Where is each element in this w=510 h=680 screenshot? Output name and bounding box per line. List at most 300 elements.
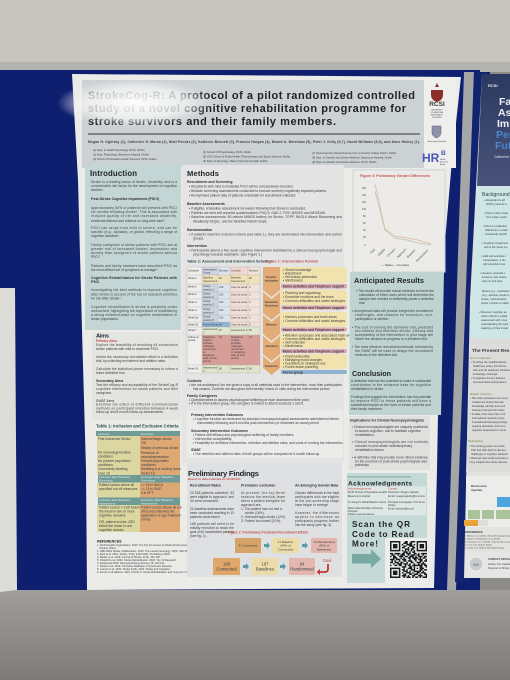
neighbour panel: the present research: • To bridge the multidisciplinary — [471, 360, 507, 364]
table 1: inclusion and exclusion criteria: Exclusion — [141, 432, 154, 436]
module 1 box: Home activities and Telephone support — [283, 284, 345, 288]
controls: has ceased. Controls are also given brief weekly 'check-in' calls during the intervention period. — [193, 387, 330, 391]
panel: introduction: specific (e.g., aphasia), or global, effecting a range of — [91, 230, 177, 234]
table 2: assessment and intervention schedule: 60 — [249, 328, 252, 332]
neighbour panel: background: with potential cross — [483, 262, 506, 266]
table 2: assessment and intervention schedule: or — [203, 350, 205, 354]
panel: implications for clinical neuropsychologists: rehabilitation. — [355, 433, 375, 437]
table 1: inclusion and exclusion criteria: Residing in a nursing home — [141, 467, 181, 471]
column: an emerging gender bias: Gender differences in the total — [295, 491, 339, 495]
y axis labels — [362, 187, 367, 247]
module 1 box — [280, 267, 347, 288]
table 2: assessment and intervention schedule: Care as usual — [231, 316, 247, 320]
table 2: assessment and intervention schedule: or telephone — [231, 350, 246, 354]
neighbour panel: the present research: between Irish and UK institu — [472, 408, 505, 412]
column: premature exclusion: 1. The patient has not had a — [241, 507, 282, 511]
baseline assessments: Baseline Assessments — [187, 202, 225, 206]
table 2: assessment and intervention schedule: support — [203, 338, 212, 342]
table 2: assessment and intervention schedule: Assessment — [203, 366, 217, 370]
panel: implications for clinical neuropsychologists: • Clinical neuropsychologists are not routinely — [352, 440, 428, 444]
table 2: assessment and intervention schedule: calls (3 time — [231, 353, 245, 357]
table 2: assessment and intervention schedule: 0 — [249, 300, 251, 304]
panel: implications for clinical neuropsychologists: • Clinical neuropsychologists are uniquely positioned — [352, 425, 428, 429]
neighbour panel: discussion agenda: Discussion — [471, 484, 487, 488]
table 2: assessment and intervention schedule: 60 — [219, 276, 222, 280]
table 1: inclusion and exclusion criteria: Screening — [141, 478, 155, 482]
display board frame — [0, 62, 510, 590]
column: recruitment rates: Recruitment Rates — [190, 484, 221, 488]
neighbour panel: the present research: Aims & Objectives: — [470, 356, 492, 360]
title: StrokeCog-R: A protocol of a pilot randomized controlled — [88, 90, 415, 102]
panel: aims: Secondary Aims — [96, 379, 123, 383]
neighbour panel: the present research: • To date, there have been mul — [470, 412, 506, 416]
HRB logo: Research — [440, 160, 448, 164]
column: an emerging gender bias: have begun to emerge. — [295, 503, 329, 507]
table 2: assessment and intervention schedule: Focus Group — [203, 322, 219, 326]
contact details: Presenter: Megan Oglesby — [388, 490, 420, 494]
panel: introduction: cognitive domains⁶. — [91, 234, 120, 238]
table 1: inclusion and exclusion criteria: Exclusion after Baseline — [141, 475, 173, 479]
column: premature exclusion: 3. Patient too unwell (10%). — [241, 519, 281, 523]
module 4 box: • Attention processes and associated brain areas — [283, 334, 355, 338]
table 1: inclusion and exclusion criteria: Inclusion after Baseline — [99, 475, 130, 479]
column: recruitment rates: 168 patients will need to be — [190, 522, 234, 526]
y axis labels: 140 — [362, 194, 367, 197]
panel: aims: Test the efficacy and acceptability of the StrokeCog-R — [96, 383, 179, 387]
table 2: assessment and intervention schedule: Week 5b — [188, 322, 199, 326]
neighbour panel: background: differences in under — [485, 228, 508, 232]
table 1: inclusion and exclusion criteria: History of previous stroke — [141, 446, 178, 450]
table 2: assessment and intervention schedule: 3 — [203, 369, 205, 373]
family caregivers: • If in the intervention group, the caregiver is invited to attend sessions 1 and 5. — [189, 402, 304, 406]
panel: implications for clinical neuropsychologists: rehabilitation teams. — [355, 448, 385, 452]
panel: anticipated results and conclusion — [349, 272, 444, 415]
neighbour panel: background: (PSCI) presents a — [486, 202, 507, 206]
table 2: assessment and intervention schedule: Group — [203, 299, 211, 303]
module 2 box: • Planning and organising — [283, 291, 321, 295]
title — [88, 90, 415, 128]
table 2: assessment and intervention schedule: session 4 — [203, 310, 215, 314]
panel: implications for clinical neuropsychologists: pathways. — [355, 463, 370, 467]
QR call to action: More! — [352, 540, 378, 548]
title: study of a novel cognitive rehabilitation programme for — [88, 103, 407, 115]
neighbour poster header — [477, 74, 510, 186]
panel: anticipated results and conclusion: • The most effective recruitment methods, informed by — [352, 345, 433, 349]
panel: anticipated results and conclusion: the SWAT will be used to design the recruitment — [355, 349, 433, 353]
panel: introduction: Cognitive Rehabilitation for Stroke Patients with — [91, 276, 177, 280]
RCSI subtitle: AND HEALTH — [431, 114, 444, 116]
module 5 box: • Psychoeducation — [283, 354, 310, 358]
panel: introduction: emotional distress and reliance on long-term care⁵. — [91, 219, 166, 223]
panel: anticipated results and conclusion: • The cost of running the definitive trial, predicted — [352, 326, 433, 330]
table 1: inclusion and exclusion criteria: conditions — [98, 463, 113, 467]
figure 2: recruitment flow — [213, 530, 337, 575]
table 2: assessment and intervention schedule: Care as usual — [231, 292, 247, 296]
neighbour panel: the present research: • This work represents one comp — [470, 396, 508, 400]
y axis labels: 20 — [363, 236, 366, 239]
table 1: inclusion and exclusion criteria: Over 18 — [98, 471, 110, 475]
module 3 box: • Memory processes and brain areas — [283, 315, 337, 319]
table 2: assessment and intervention schedule: telephone — [203, 353, 215, 357]
panel: anticipated results and conclusion: calculation of effect sizes which will determine the — [359, 293, 434, 297]
column: an emerging gender bias: participants progress further — [295, 519, 340, 523]
panel: introduction: Patients and family members have described PSCI as — [91, 264, 177, 268]
references: 7. Rohde et al. 2019. Cochrane Database of Systematic Reviews. — [97, 564, 173, 568]
table 2: assessment and intervention schedule: Minutes — [249, 268, 259, 272]
table 1: inclusion and exclusion criteria: conditions — [98, 454, 113, 458]
module 3 box — [280, 312, 347, 332]
QR code — [385, 538, 428, 583]
chevron: executive functions: Functions — [265, 304, 279, 308]
acknowledgment list: Mater Misericordiae University — [348, 506, 384, 510]
panel: aims: Examine the effect of different communication — [96, 402, 178, 406]
outcomes box: • Feasibility for definitive intervention, retention and attrition rates, and costs of running the intervention. — [193, 441, 343, 445]
table 2: assessment and intervention schedule: Week 2 — [188, 284, 197, 288]
QR call to action — [352, 520, 414, 548]
heading: preliminary findings: Preliminary Findings — [188, 469, 259, 478]
affiliations: (4) School of Physiotherapy, RCSI, Dublin. — [203, 150, 252, 154]
column: recruitment rates: been conducted resulting in 13 — [190, 511, 234, 515]
neighbour panel: the present research: ongoing discussion forums to — [472, 424, 506, 428]
randomisation: • If patients meet the inclusion criteria (see table 1), they are randomised into intervention and control — [189, 232, 342, 236]
neighbour panel: background: • Moreover, cognitive as — [479, 310, 507, 314]
panel: introduction: Family caregivers of stroke patients with PSCI are at — [91, 243, 177, 247]
table 1: inclusion and exclusion criteria: Community dwelling — [98, 467, 128, 471]
panel: introduction — [85, 165, 181, 330]
neighbour footer with badge: ISA — [473, 562, 480, 567]
HRB logo — [422, 150, 448, 166]
contact details: Email: meganoglesby@rcsi.com — [388, 494, 425, 498]
table 2: assessment and intervention schedule: Care as usual — [231, 308, 247, 312]
QR call to action: Scan the QR — [352, 520, 410, 529]
column: an emerging gender bias: at the pre-screening stage — [295, 499, 339, 503]
table 1: inclusion and exclusion criteria: Inclusion — [98, 432, 110, 436]
chevron: attention: Attention — [265, 344, 278, 348]
recruitment and screening — [187, 180, 327, 198]
table 2: assessment and intervention schedule: 0 — [249, 285, 251, 289]
panel: introduction: researched, highlighting the importance of establishing — [91, 309, 177, 313]
references — [97, 540, 193, 574]
table 2: assessment and intervention schedule: Group — [203, 307, 211, 311]
table 2: assessment and intervention schedule: 100 — [219, 316, 224, 320]
panel: anticipated results and conclusion: methods of the definitive trial. — [355, 353, 398, 357]
authors: Megan H. Oglesby (1), Catherine N. Moran (2), Niall Pender (2), Kathleen Bennett (3), Frances Horgan (4), Niamh A. Merriman (5), Peter J. Kelly (6,7), David Williams (8,9), and Anne Hickey (1). — [88, 140, 420, 144]
recruitment and screening: Recruitment and Screening — [187, 180, 233, 184]
acknowledgment list: Patient representatives — [348, 512, 375, 516]
neighbouring poster edge on the left — [0, 288, 17, 592]
panel: introduction: greater risk of increased burden, depression and — [91, 247, 177, 251]
table 2: assessment and intervention schedule: Intervention — [203, 268, 217, 272]
panel: aims: Explore the feasibility of recruiting 64 consecutive — [96, 343, 178, 347]
table 2: assessment and intervention schedule: Assessment 2 — [231, 328, 248, 332]
neighbour panel: background: and to the mood, em — [484, 245, 508, 249]
neighbour panel: the present research: • Key insights from these discuss — [469, 460, 508, 464]
neighbour panel: the present research: international research group — [472, 416, 505, 420]
neighbour panel: discussion agenda: Agenda — [471, 488, 482, 492]
column: recruitment rates — [190, 484, 234, 538]
table 2: assessment and intervention schedule: Week 4 — [188, 308, 197, 312]
chevron: psycho-education: education — [265, 278, 278, 282]
neighbour panel: the present research: Translational Neuropsychology — [472, 420, 508, 424]
outcomes box: • Cognitive function as measured by standard neuropsychological assessments administered before — [193, 417, 339, 421]
panel: anticipated results and conclusion: sample size needed to sufficiently power a definitive — [359, 297, 434, 301]
table 2: assessment and intervention schedule: Week 1 — [188, 276, 197, 280]
table 2: assessment and intervention schedule: 60 — [219, 366, 222, 370]
y axis labels: 80 — [363, 215, 366, 218]
panel: introduction: anxiety than caregivers of stroke patients without — [91, 251, 177, 255]
references: 9. James Lind Alliance. 2021. Priority 5: Stroke Rehabilitation and Long-term Care. — [97, 570, 192, 574]
table 1: inclusion and exclusion criteria: Haemorrhagic stroke — [141, 437, 172, 441]
x axis labels: Eligible — [377, 247, 386, 257]
panel: anticipated results and conclusion: rehabilitation in stroke. — [351, 387, 384, 391]
panel: aims: SWAT Aims — [96, 399, 114, 403]
box: 168 consented — [213, 558, 240, 575]
table 1: inclusion and exclusion criteria: application of age-matched — [141, 514, 181, 518]
baseline assessments — [187, 202, 342, 224]
table 2: assessment and intervention schedule: Assessment 3 — [231, 366, 248, 370]
table 2: assessment and intervention schedule: Schedule — [188, 268, 199, 272]
table 1: inclusion and exclusion criteria: <= 18 in MoCA — [141, 483, 164, 487]
baseline assessments: Weakbody SEQoL, and the Modified Rankin Scale. — [193, 220, 268, 224]
module 2 box: Home activities and Telephone support — [283, 306, 345, 310]
column: premature exclusion: Premature exclusion — [241, 484, 275, 488]
table 1: inclusion and exclusion criteria: specified cut-off measures — [99, 487, 138, 491]
panel: anticipated results and conclusion: participation or attrition. — [355, 317, 389, 321]
x axis labels: Consent — [386, 247, 396, 258]
module 3 box: • Common difficulties and useful strategies — [283, 319, 345, 323]
neighbour panel: the present research: • Meetings were audio-recorded a — [469, 456, 508, 460]
RCSI subtitle: SCIENCES — [432, 117, 443, 119]
outcomes box: Primary Intervention Outcomes — [191, 413, 243, 417]
table 2: assessment and intervention schedule: Assessment — [231, 279, 245, 283]
HRB logo: B — [441, 150, 446, 157]
arrow — [302, 542, 308, 549]
table 1: inclusion and exclusion criteria — [96, 424, 182, 532]
neighbour references: 4. Lees et al. (2014). Stroke — [465, 544, 493, 546]
module 1 box: • Mindfulness — [283, 278, 303, 282]
panel: anticipated results and conclusion: A definitive trial has the potential to make a substantial — [351, 379, 431, 383]
table 2: assessment and intervention schedule: 60 — [249, 366, 252, 370]
column: recruitment rates: patients randomised. — [190, 515, 221, 519]
table 1: inclusion and exclusion criteria: Presence of — [141, 451, 159, 455]
table 1: inclusion and exclusion criteria: No neurodegenerative — [98, 450, 131, 454]
table 1: inclusion and exclusion criteria: the mean in two or more — [99, 510, 135, 514]
neighbour panel: background: • PSCI is a collection — [483, 224, 508, 228]
glare over title — [57, 79, 213, 127]
controls: Controls — [187, 379, 201, 383]
table 1: inclusion and exclusion criteria: <= 13 in FAST — [141, 487, 162, 491]
panel: introduction: Stroke is a leading cause of death¹, disability² and is a — [91, 180, 177, 184]
panel: introduction: for Life After Stroke⁹. — [91, 296, 122, 300]
chevron: psycho-education: Psycho- — [266, 275, 277, 279]
column: an emerging gender bias: However, the differences — [295, 511, 339, 515]
outcomes box: SWAT — [191, 448, 202, 452]
family caregivers: Family Caregivers — [187, 394, 217, 398]
recruitment and screening: • Bedside screening assessments conducted to exclude severely cognitively impaired patients. — [189, 189, 327, 193]
table 2: assessment and intervention schedule: points) — [203, 359, 211, 363]
panel: anticipated results and conclusion: inform the decision to progress to a definitive trial. — [355, 337, 428, 341]
chevron: executive functions: Executive — [265, 300, 278, 304]
table 2: assessment and intervention schedule: 100 — [219, 300, 224, 304]
Beaumont label: Beaumont Hospital — [428, 140, 447, 143]
HRB logo: Health — [440, 158, 445, 161]
table 1: inclusion and exclusion criteria: Assessment — [99, 501, 116, 505]
box: 107 baselines: Baselines — [256, 566, 274, 572]
column: premature exclusion: reasons the medical team — [241, 495, 285, 499]
heading: acknowledgments: Acknowledgments — [348, 480, 412, 488]
title: stroke survivors and their family members. — [88, 116, 336, 128]
neighbour panel: background: understanding the resul — [481, 322, 509, 326]
panel: anticipated results and conclusion: their family members. — [351, 407, 383, 411]
column: recruitment rates: (see fig. 2). — [190, 534, 207, 538]
box: 21 baseline: (64% of — [280, 544, 291, 548]
panel: aims: trial, by collecting recruitment and attrition rates. — [96, 359, 166, 363]
module 5 box: • Future action planning — [283, 365, 318, 369]
box: 21 baseline: Consented) — [278, 547, 293, 551]
column: premature exclusion: stroke (16%). — [245, 511, 265, 515]
panel: acknowledgments — [347, 473, 428, 583]
table 1: inclusion and exclusion criteria: Assessment — [141, 501, 158, 505]
neighbour panel: background: rather reflects a multidi — [481, 314, 508, 318]
neighbour panel: background: • Alongside the aff — [484, 198, 505, 202]
table 1: inclusion and exclusion criteria: 4 in EFT — [141, 491, 153, 495]
affiliations: (9) Dept. of Geriatric and Stroke Medicine, RCSI, Dublin. — [312, 160, 377, 164]
x axis labels: Approach — [396, 247, 407, 259]
neighbour panel: background: • Cognitive impairment — [482, 241, 508, 245]
box: 13 randomised: 13 Randomised — [313, 540, 335, 544]
column: recruitment rates: were eligible to approach, and — [190, 495, 234, 499]
table 2: assessment and intervention schedule: includes — [203, 341, 213, 345]
neighbour panel: the present research: healthcare policy, formed the — [473, 364, 507, 368]
references: 1. World Health Organization. 2020. The Top 10 Causes of Death [Online Accessed — [97, 543, 193, 547]
column: an emerging gender bias: participants who are eligible — [295, 495, 339, 499]
neighbour panel: background: others' number in relatio — [481, 301, 509, 305]
panel: introduction: the most difficult set of symptoms to manage⁸. — [91, 268, 159, 272]
panel: aims: methods on participant retention between 4-week — [96, 406, 178, 410]
icon: arrow to QR code — [352, 549, 381, 568]
table 2: assessment and intervention schedule: Group — [203, 292, 211, 296]
table 2: assessment and intervention schedule: 0 — [249, 308, 251, 312]
table 1 title: Table 1: Inclusion and Exclusion Criteria — [96, 424, 179, 428]
references: 2. GBD 2019 Stroke Collaborators. 2019. The Lancet Neurology, 18(5), 439-458. — [97, 549, 190, 553]
recruitment and screening: • Anonymised patient data of patients unsuitable for recruitment collected. — [189, 194, 296, 198]
x axis labels: Randomised — [415, 248, 429, 263]
randomisation — [187, 228, 342, 240]
neighbour panel: background: burden, administration — [481, 297, 507, 301]
RCSI subtitle — [431, 110, 444, 119]
chevron: emotions: Emotions — [265, 364, 278, 368]
y axis labels: 60 — [363, 222, 366, 225]
column: recruitment rates: 21 baseline assessments have — [190, 507, 234, 511]
panel: introduction: Investigating the best methods to improve cognition — [91, 288, 177, 292]
acknowledgment list — [348, 486, 387, 516]
column: an emerging gender bias: into the study (see fig. 3). — [295, 523, 332, 527]
column: recruitment rates: goal of 64 randomised patients — [190, 530, 234, 534]
table 2: assessment and intervention schedule: Minutes — [219, 268, 229, 272]
table 1: inclusion and exclusion criteria: TIA — [141, 441, 147, 445]
line: females — [375, 184, 431, 244]
baseline assessments: • Patients are sent self-reported questionnaires: PHQ-9, GAD-7, FSS, MSSES and WHODAS. — [189, 211, 326, 215]
panel: figure 3 gender differences chart — [353, 170, 445, 272]
outcomes box: Secondary Intervention Outcomes — [191, 429, 248, 433]
table 1: inclusion and exclusion criteria: Patient scores <-1SD below — [99, 506, 140, 510]
module 4 box: • Self-reflection — [283, 340, 305, 344]
chevron: psycho-education — [263, 267, 280, 297]
neighbour panel: background: • PSCI is often under — [484, 211, 508, 215]
figure 1: intervention format — [263, 260, 355, 375]
panel: implications for clinical neuropsychologists: Implications for Clinical Neuropsychologists — [350, 418, 424, 422]
panel: aims: Inform the necessary recruitment effort in a definitive — [96, 355, 178, 359]
module 4 box: • Mindfulness — [283, 344, 303, 348]
panel: anticipated results and conclusion: • Anonymised data will provide insight into recruitment — [352, 309, 433, 313]
neighbour panel: background: assessment with cross — [481, 318, 508, 322]
table 2: assessment and intervention schedule: Controls — [231, 268, 241, 272]
module 2 box: • Executive functions and the brain — [283, 295, 334, 299]
RCSI subtitle: UNIVERSITY — [431, 110, 443, 112]
panel: preliminary findings — [187, 463, 342, 577]
panel: anticipated results and conclusion: challenges, and reasons for exclusion, non- — [355, 313, 433, 317]
neighbour panel: background: trajectory of their impair — [481, 326, 508, 330]
table 2: assessment and intervention schedule: period — [188, 338, 196, 342]
neighbour poster header: RCSI — [488, 83, 498, 88]
table 2: assessment and intervention schedule: Care as usual — [231, 300, 247, 304]
contact details: Email: ahickey@rcsi.ie — [388, 506, 415, 510]
references: 8. Lanctot et al. 2020. Stroke 51(3), 2020. Stroke and Cognition. — [97, 567, 171, 571]
box: 61 consented: 61 Consented — [239, 544, 258, 548]
table 1: inclusion and exclusion criteria: cognitive domains — [99, 514, 126, 518]
table 2: assessment and intervention schedule: 60 — [249, 276, 252, 280]
box: 64 randomised: Randomised — [290, 566, 314, 572]
box: 168 consented: 168 — [223, 562, 231, 566]
table 2: assessment and intervention schedule: Week 7 — [188, 328, 197, 332]
outcomes box — [187, 410, 343, 458]
table 1: inclusion and exclusion criteria: Inclusion after Baseline — [99, 498, 130, 502]
neighbour panel: background — [470, 186, 510, 338]
heading: aims: Aims — [96, 334, 109, 340]
y axis labels: 160 — [362, 187, 367, 190]
y axis labels: 40 — [363, 229, 366, 232]
table 1: inclusion and exclusion criteria: OR, patient scores -2SD — [99, 520, 135, 524]
x axis labels: Baseline — [406, 248, 417, 259]
neighbour panel: the present research: Charlemont Grant) that was — [472, 400, 505, 404]
panel: anticipated results and conclusion: recruitment and retention efforts, efficacy and — [355, 329, 433, 333]
arrow — [264, 542, 270, 549]
outcomes box: • The retention and attrition rates of both groups will be compared at 6-month follow-up. — [193, 452, 320, 456]
panel: aims: Calculate the statistical power necessary to inform a — [96, 367, 178, 371]
panel: implications for clinical neuropsychologists — [349, 416, 430, 470]
neighbour panel: background: factors (e.g., medication — [482, 289, 510, 293]
neighbour references — [465, 530, 510, 550]
panel: aims: follow-up and 6-month follow-up assessments. — [96, 410, 164, 414]
references: REFERENCES — [97, 540, 122, 544]
neighbour panel: the present research: and associated interpretation — [473, 380, 507, 384]
panel: anticipated results and conclusion: acceptability of the intervention in pilot stage will — [355, 333, 433, 337]
neighbour panel: the present research: challenges in cognitive assessm — [471, 452, 508, 456]
panel: introduction: PSCI⁷. — [91, 255, 101, 259]
neighbour panel: the present research: knowledge exchange — [473, 372, 498, 376]
neighbour panel: background: • Valid and sensitive c — [481, 254, 507, 258]
panel: aims: stroke patients with mild to moderate PSCI. — [96, 347, 159, 351]
module 5 box: Focus group — [283, 370, 303, 374]
panel: aims: cognitive intervention for stroke patients and their — [96, 387, 179, 391]
panel: introduction: Post-Stroke Cognitive Impairment (PSCI) — [91, 197, 159, 201]
neighbour panel: background: interpretation, a clin — [483, 258, 506, 262]
module 2 box: • Common difficulties and useful strategies — [283, 299, 345, 303]
table 1: inclusion and exclusion criteria: Screening — [99, 478, 113, 482]
column: premature exclusion: deem a patient ineligible for — [241, 499, 286, 503]
panel: implications for clinical neuropsychologists: for the provision of post-stroke psychological care — [355, 460, 428, 464]
box: 21 baseline — [272, 538, 299, 553]
